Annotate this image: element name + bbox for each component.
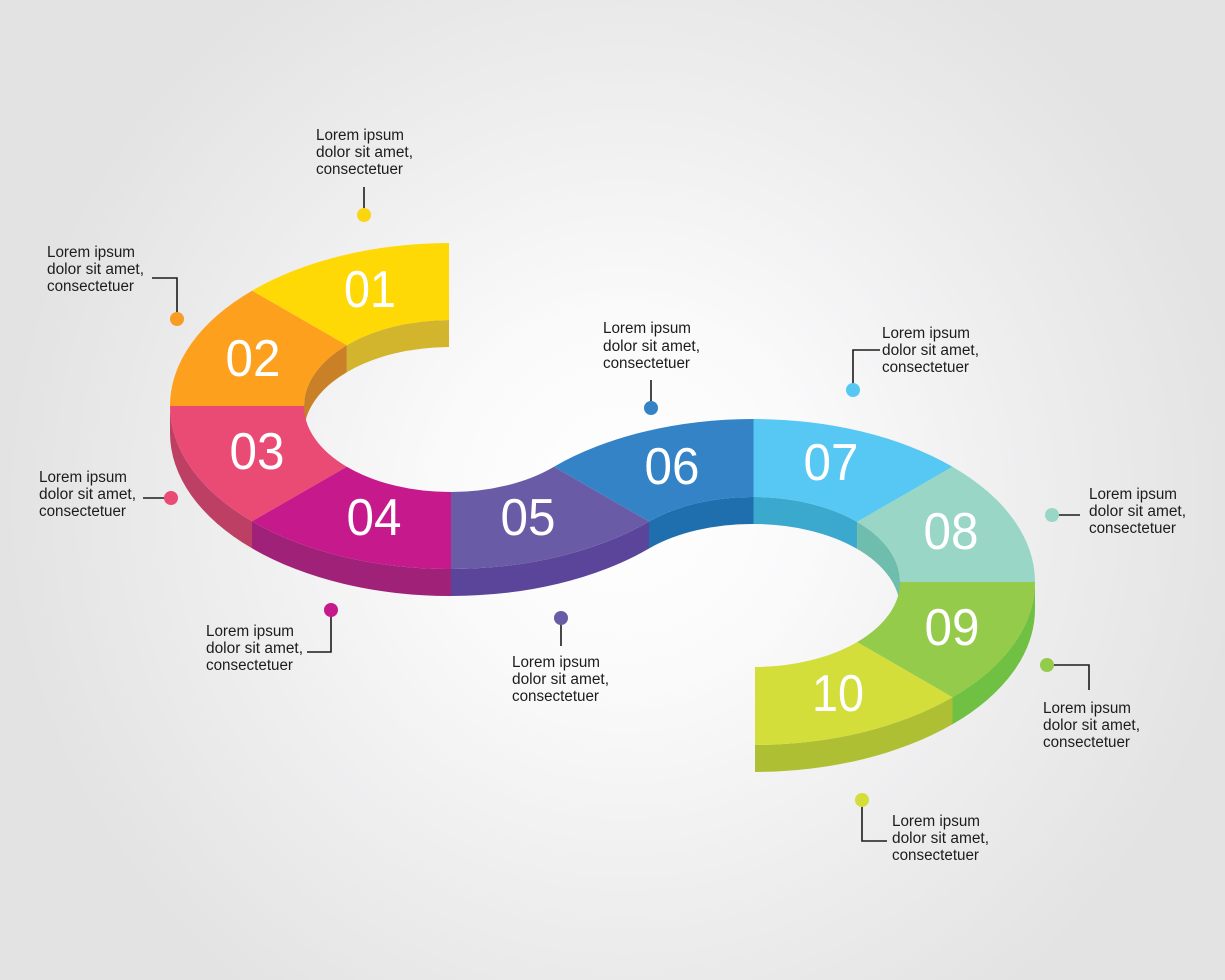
callout 02: consectetuer: [47, 278, 134, 295]
callout 01: [316, 127, 413, 222]
callout 08: dolor sit amet,: [1089, 503, 1186, 520]
callout 08: [1045, 486, 1186, 537]
segment 07: 07: [804, 434, 858, 492]
callout 02: dolor sit amet,: [47, 261, 144, 278]
callout 03: dolor sit amet,: [39, 486, 136, 503]
segment 06: [554, 419, 754, 548]
callout 06: consectetuer: [603, 355, 690, 372]
callout 09: dolor sit amet,: [1043, 717, 1140, 734]
segment 09: 09: [924, 599, 980, 657]
callout 03: consectetuer: [39, 503, 126, 520]
callout 09: Lorem ipsum: [1043, 700, 1131, 717]
callout 08: Lorem ipsum: [1089, 486, 1177, 503]
segment 08: [857, 467, 1035, 609]
segment 01: 01: [344, 261, 396, 319]
segment 10: 10: [812, 665, 864, 723]
segment 07: [754, 419, 952, 549]
callout 05: [512, 611, 609, 705]
callout 07: Lorem ipsum: [882, 325, 970, 342]
callout 10: Lorem ipsum: [892, 813, 980, 830]
segment 09: [857, 582, 1035, 724]
callout 07: consectetuer: [882, 359, 969, 376]
segment 02: [170, 291, 347, 433]
callout 05: Lorem ipsum: [512, 654, 600, 671]
callout 04: Lorem ipsum: [206, 623, 294, 640]
callout 10: consectetuer: [892, 847, 979, 864]
callout 04: [206, 603, 338, 674]
callout 05: dolor sit amet,: [512, 671, 609, 688]
callout 10: dolor sit amet,: [892, 830, 989, 847]
diagram: S-shaped ring: [170, 243, 1035, 772]
segment 03: 03: [230, 423, 284, 481]
segment 04: [252, 467, 451, 596]
callout 04: dolor sit amet,: [206, 640, 303, 657]
callout 06: [603, 320, 700, 415]
callout 10: [855, 793, 989, 864]
callout 04: consectetuer: [206, 657, 293, 674]
callout 09: consectetuer: [1043, 734, 1130, 751]
callout 02: Lorem ipsum: [47, 244, 135, 261]
callout 07: [846, 325, 979, 397]
segment 06: 06: [644, 438, 700, 496]
callout 01: dolor sit amet,: [316, 144, 413, 161]
callout 01: Lorem ipsum: [316, 127, 404, 144]
segment 08: 08: [924, 503, 978, 561]
callout 08: consectetuer: [1089, 520, 1176, 537]
callout 01: consectetuer: [316, 161, 403, 178]
segment 01: [252, 243, 449, 372]
callout 09: [1040, 658, 1140, 751]
callout 03: Lorem ipsum: [39, 469, 127, 486]
segment 04: 04: [346, 489, 402, 547]
segment 05: 05: [500, 489, 556, 547]
segment 02: 02: [226, 330, 280, 388]
callout 05: consectetuer: [512, 688, 599, 705]
segment 03: [170, 406, 347, 548]
segment 05: [451, 467, 649, 596]
callout 07: dolor sit amet,: [882, 342, 979, 359]
callout 03: [39, 469, 178, 520]
callout 06: dolor sit amet,: [603, 338, 700, 355]
segment 10: [755, 642, 952, 772]
callout 06: Lorem ipsum: [603, 320, 691, 337]
callout 02: [47, 244, 184, 326]
